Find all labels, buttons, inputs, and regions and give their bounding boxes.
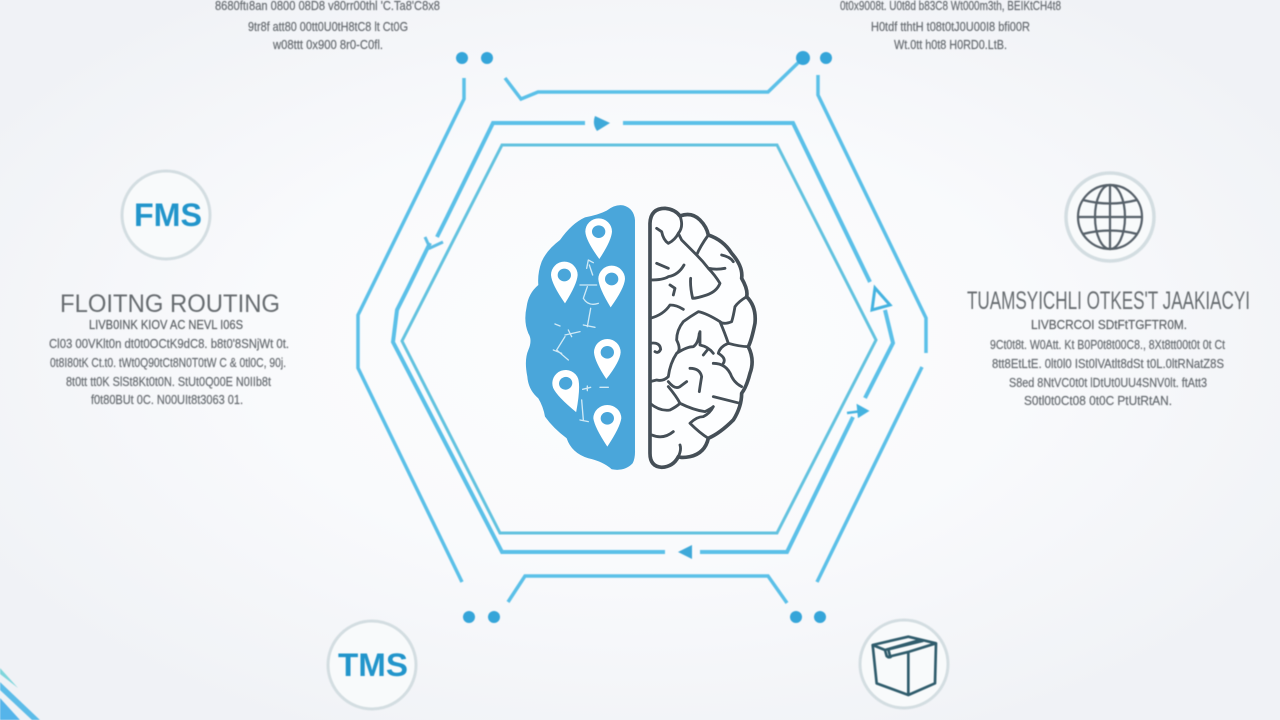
text block: transport analytics — [967, 287, 1250, 408]
arrow: bottom — [678, 545, 692, 559]
subheading: transport analytics: LIVBCRCOI SDtFtTGFTR0M. — [1031, 318, 1187, 332]
pin 2 — [551, 262, 578, 303]
subheading: floating routing: LIVB0INK KIOV AC NEVL I06S — [89, 318, 243, 332]
connector dots: bottom left — [463, 611, 500, 623]
outer frame: right — [817, 75, 926, 582]
route squiggles — [553, 260, 608, 422]
connector dots: top left — [456, 52, 493, 64]
pin 5 — [549, 366, 589, 417]
connector dots: bottom right — [790, 611, 826, 623]
brain right half outline — [650, 208, 755, 467]
inner frame — [402, 145, 876, 533]
arrow: top — [594, 116, 610, 131]
corner accent stripes — [0, 668, 40, 720]
body: floating routing: 8t0tt tt0K SlSt8Kt0t0N. StUt0Q00E N0IIb8t — [66, 375, 271, 389]
badge: TMS: TMS — [338, 647, 408, 683]
pin 1 — [585, 218, 612, 259]
body: floating routing: 0t8I80tK Ct.t0. tWt0Q90tCt8N0T0tW C & 0tl0C, 90j. — [50, 356, 286, 370]
brain folds — [650, 216, 748, 457]
outer frame: left — [358, 78, 464, 582]
body: transport analytics: S0tl0t0Ct08 0t0C PtUtRtAN. — [1024, 394, 1172, 408]
connector dots: top right — [796, 51, 832, 65]
body: transport analytics: S8ed 8NtVC0t0t lDtUt0UU4SNV0lt. ftAtt3 — [1009, 376, 1207, 390]
text block: top left — [215, 0, 440, 52]
badge: globe icon — [1066, 173, 1154, 261]
text block: top right — [840, 0, 1061, 52]
body: floating routing — [49, 337, 289, 407]
pin 6 — [593, 405, 621, 447]
badge: FMS — [122, 171, 210, 259]
brain illustration — [525, 205, 755, 470]
body: transport analytics: 8tt8EtLtE. 0lt0l0 ISt0lVAtlt8dSt t0L.0ltRNatZ8S — [992, 357, 1224, 371]
pin 4 — [594, 339, 621, 379]
badge: TMS — [328, 621, 416, 709]
text block: top left: 9tr8f att80 00tt0U0tH8tC8 lt Ct0G — [248, 20, 408, 34]
badge: package box icon — [860, 620, 948, 708]
body: transport analytics — [990, 338, 1225, 408]
heading: floating routing: FLOITNG ROUTING — [60, 290, 280, 318]
arrow: right outline — [872, 288, 890, 310]
outer frame: bottom — [508, 576, 787, 603]
body: floating routing: Cl03 00VKlt0n dt0t0OCtK9dC8. b8t0'8SNjWt 0t. — [49, 337, 289, 351]
arrow: lower right — [847, 406, 867, 416]
middle frame — [393, 123, 893, 552]
pin 3 — [598, 266, 625, 307]
body: floating routing: f0t80BUt 0C. N00UIt8t3063 01. — [91, 393, 243, 407]
hexagon frame — [358, 51, 926, 623]
arrow: left chevron — [425, 237, 443, 248]
text block: top left: w08ttt 0x900 8r0-C0fl. — [272, 38, 383, 52]
badge: FMS: FMS — [134, 197, 202, 233]
body: transport analytics: 9Ct0t8t. W0Att. Kt B0P0t8t00C8., 8Xt8tt00t0t 0t Ct — [990, 338, 1225, 352]
text block: floating routing — [49, 290, 289, 407]
outer frame: top — [505, 58, 803, 99]
text block: top right: Wt.0tt h0t8 H0RD0.LtB. — [894, 38, 1007, 52]
text block: top right: H0tdf tthtH t08t0tJ0U00I8 bfi00R — [871, 20, 1030, 34]
brain left half with map pins — [525, 205, 635, 470]
